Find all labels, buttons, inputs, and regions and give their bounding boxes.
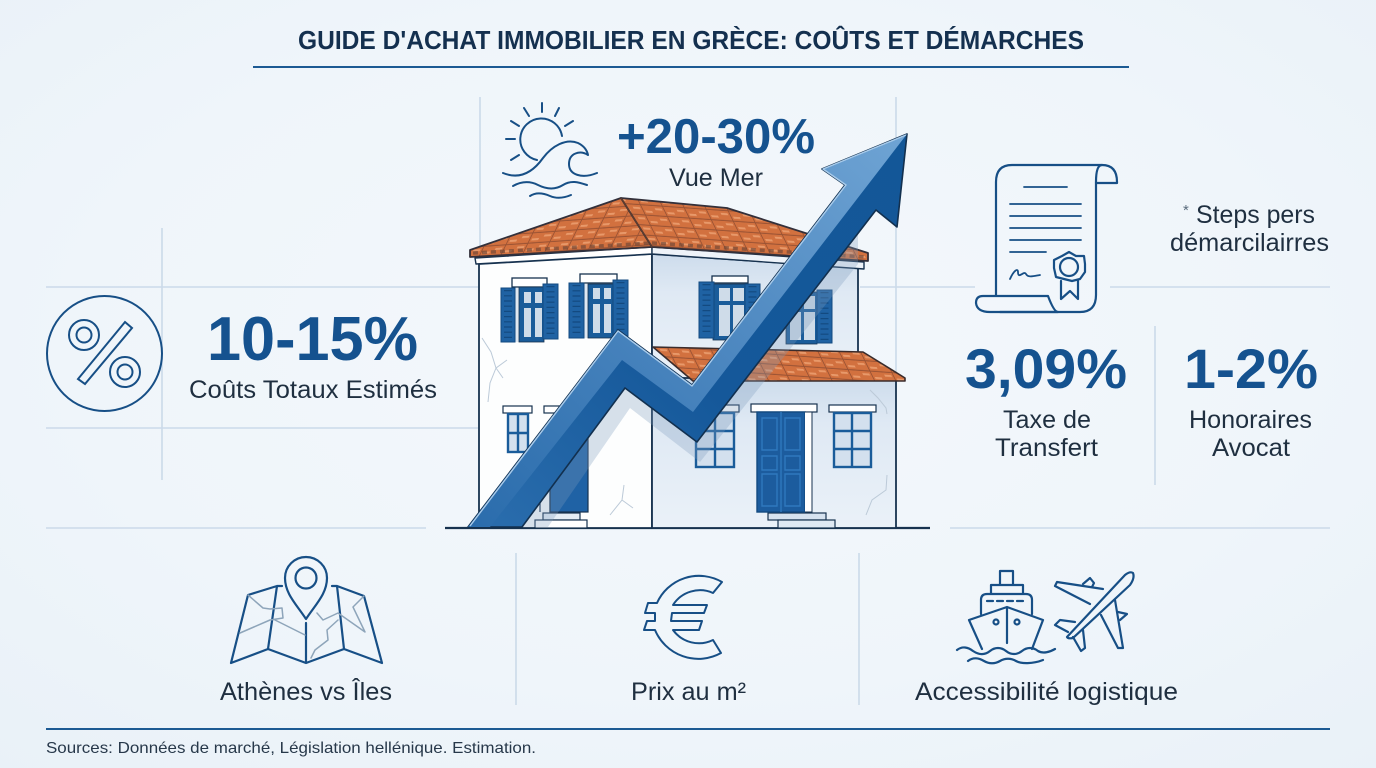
panel: sea view xyxy=(503,103,815,198)
icon: ship xyxy=(957,571,1055,663)
ground line xyxy=(445,527,930,529)
panel: transfer tax xyxy=(965,337,1127,462)
panel: total costs xyxy=(47,296,437,411)
text: steps note: Steps pers xyxy=(1196,201,1315,229)
arrow shadow xyxy=(522,232,858,527)
panel: lawyer fees xyxy=(1184,337,1318,462)
panel: lawyer fees: 1-2% xyxy=(1184,337,1318,400)
shutters xyxy=(501,280,832,343)
icon: plane xyxy=(1055,572,1134,651)
wall cracks xyxy=(482,338,887,515)
upper windows xyxy=(501,274,832,344)
label: total costs: Coûts Totaux Estimés xyxy=(189,376,437,404)
rising arrow xyxy=(468,134,907,527)
figure: sea view: +20-30% xyxy=(617,110,815,164)
label: Athens vs islands: Athènes vs Îles xyxy=(220,677,392,706)
icon: sun and wave xyxy=(503,103,597,198)
label: sea view: Vue Mer xyxy=(669,164,763,192)
main roof xyxy=(470,198,868,269)
icon: notarial deed xyxy=(976,165,1117,312)
title: GUIDE D'ACHAT IMMOBILIER EN GRÈCE: COÛTS ET DÉMARCHES xyxy=(298,25,1084,55)
panel: logistics access xyxy=(915,571,1178,706)
figure: total costs: 10-15% xyxy=(207,305,418,374)
icon: euro xyxy=(644,576,722,659)
window glass and frames xyxy=(515,284,817,344)
panel: transfer tax: Transfert xyxy=(995,434,1098,462)
lower windows and doors xyxy=(503,404,876,528)
label: price per square metre: Prix au m² xyxy=(631,678,746,706)
panel: transfer tax: Taxe de xyxy=(1003,406,1091,434)
lower roof xyxy=(653,347,905,381)
text: steps note xyxy=(1170,201,1329,257)
icon: percent xyxy=(47,296,162,411)
icon: map with pin xyxy=(231,557,382,663)
panel: price per square metre xyxy=(631,576,746,706)
label: logistics access: Accessibilité logistique xyxy=(915,678,1178,706)
text: steps note: * xyxy=(1183,202,1189,219)
panel: lawyer fees: Avocat xyxy=(1212,434,1290,462)
illustration: house with rising arrow xyxy=(445,134,930,528)
house walls xyxy=(479,254,896,528)
panel: lawyer fees: Honoraires xyxy=(1189,406,1312,434)
text: steps note: démarcilairres xyxy=(1170,229,1329,257)
panel: transfer tax: 3,09% xyxy=(965,337,1127,400)
panel: Athens vs islands xyxy=(220,557,392,706)
footer: sources: Sources: Données de marché, Législation hellénique. Estimation. xyxy=(46,740,536,757)
